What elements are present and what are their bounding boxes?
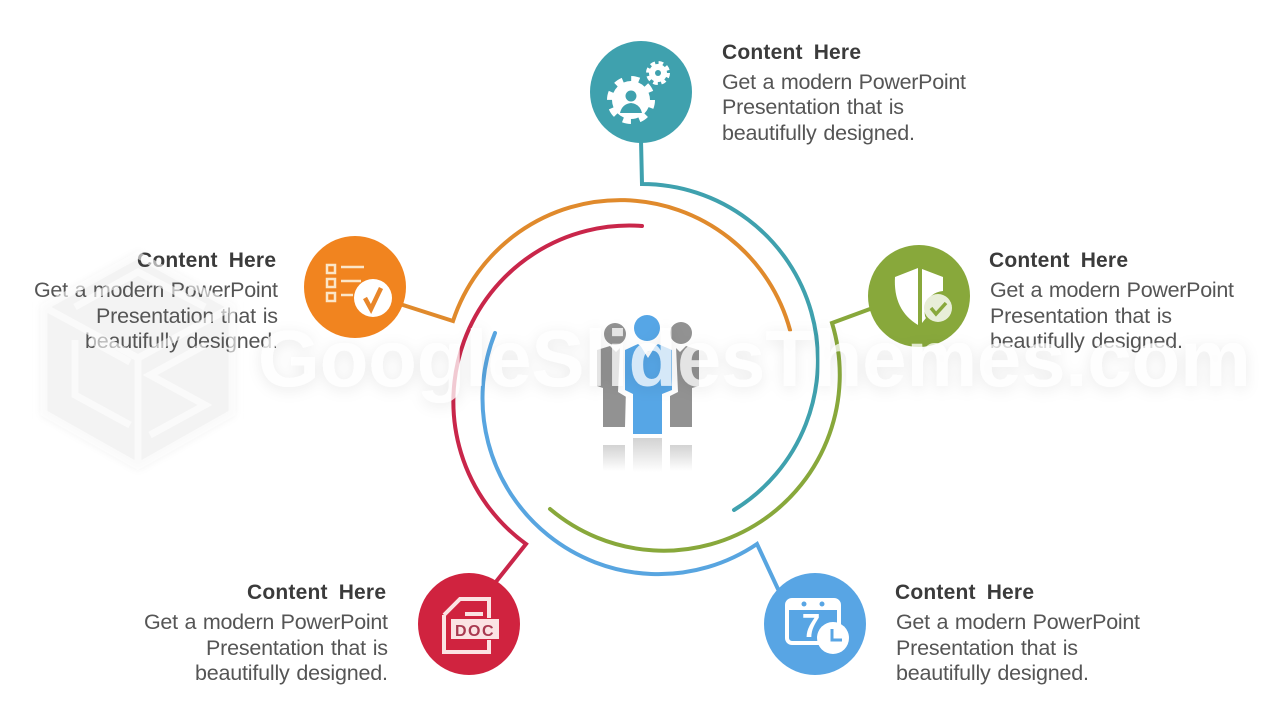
text block: top: Content Here xyxy=(722,41,861,64)
text block: right: beautifully designed. xyxy=(990,329,1183,353)
text block: bottom left xyxy=(144,581,388,685)
text block: top: beautifully designed. xyxy=(722,121,915,145)
text block: right xyxy=(989,249,1234,353)
icon: document: DOC xyxy=(455,623,495,640)
text block: bottom right: Get a modern PowerPoint xyxy=(896,610,1140,634)
icon: small gear xyxy=(648,63,668,83)
icon: checklist xyxy=(327,265,364,301)
connector arc: red xyxy=(453,226,642,583)
connector arc: orange xyxy=(403,200,790,330)
icon reflection xyxy=(603,438,692,472)
watermark logo: shaded faces xyxy=(41,252,235,470)
text block: bottom left: Get a modern PowerPoint xyxy=(144,610,388,634)
icon: calendar: 7 xyxy=(802,607,820,644)
center icon: team of three people xyxy=(597,315,699,472)
text block: bottom left: Presentation that is xyxy=(206,636,388,660)
icon: large gear xyxy=(610,79,652,121)
teal node with gears icon xyxy=(590,41,692,143)
connector arc: blue xyxy=(482,333,784,602)
text block: left xyxy=(34,249,278,353)
text block: bottom right: beautifully designed. xyxy=(896,661,1089,685)
connector arc: teal xyxy=(641,140,818,510)
text block: top xyxy=(722,41,966,145)
blue node with calendar icon xyxy=(764,573,866,675)
text block: left: Presentation that is xyxy=(96,304,278,328)
icon: check badge xyxy=(924,294,952,322)
text block: bottom right: Presentation that is xyxy=(896,636,1078,660)
text block: bottom left: beautifully designed. xyxy=(195,661,388,685)
text block: right: Presentation that is xyxy=(990,304,1172,328)
text block: bottom right: Content Here xyxy=(895,581,1034,604)
orange node with checklist icon xyxy=(304,236,406,338)
text block: left: Get a modern PowerPoint xyxy=(34,278,278,302)
person: right gray xyxy=(670,322,699,427)
text block: top: Presentation that is xyxy=(722,95,904,119)
icon: shield xyxy=(895,268,943,325)
person: left gray xyxy=(597,323,626,427)
icon: clock xyxy=(817,622,849,654)
text block: bottom left: Content Here xyxy=(247,581,386,604)
text block: left: beautifully designed. xyxy=(85,329,278,353)
text block: right: Get a modern PowerPoint xyxy=(990,278,1234,302)
text block: left: Content Here xyxy=(137,249,276,272)
green node with shield icon xyxy=(868,245,970,347)
icon: check badge xyxy=(354,279,392,317)
text block: bottom right xyxy=(895,581,1140,685)
person: center blue xyxy=(618,315,678,438)
watermark text: GoogleSlidesThemes.com xyxy=(258,314,1251,403)
watermark logo: white cube lines xyxy=(44,255,232,466)
text block: top: Get a modern PowerPoint xyxy=(722,70,966,94)
text block: right: Content Here xyxy=(989,249,1128,272)
red node with DOC icon xyxy=(418,573,520,675)
connector arc: green xyxy=(550,309,870,551)
